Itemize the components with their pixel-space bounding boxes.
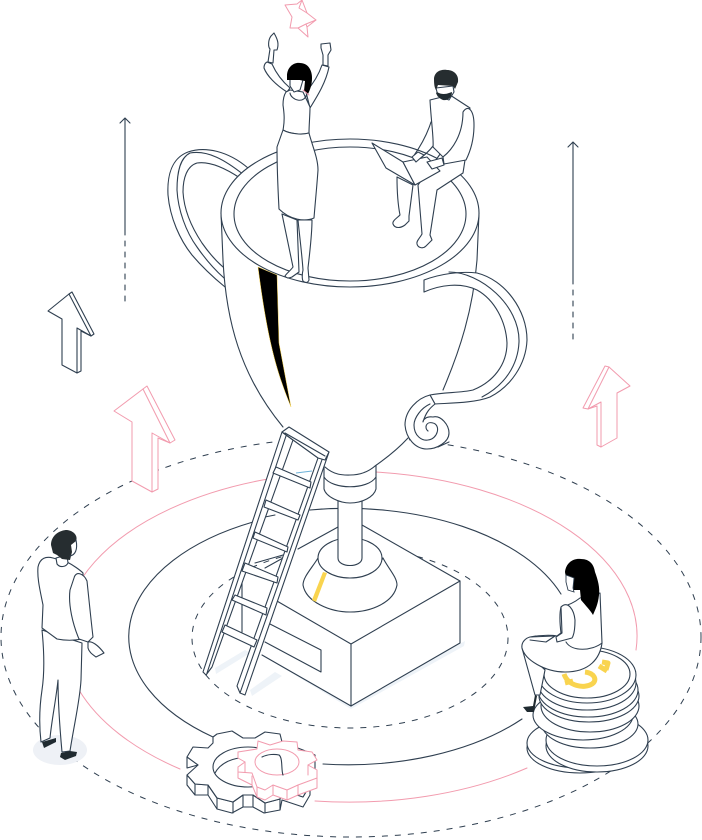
handle ribbon [424,272,527,404]
legs [282,214,299,278]
person: woman cheering on rim [264,33,331,282]
coin stack [527,647,648,773]
icon: gold dollar sign [564,662,608,686]
yellow highlight strip [312,572,327,602]
trophy base dome [303,538,397,612]
torso [430,95,470,157]
shadow [33,735,87,765]
arm [443,108,474,164]
plinth label plate [265,623,321,672]
trophy right handle with scroll [405,272,527,449]
dark gear [187,731,315,813]
right rail [237,452,329,695]
shoes [42,738,77,760]
gears [187,731,317,813]
arrow: pink 3d up left [114,386,175,492]
legs [40,630,82,752]
head and hair [290,78,303,92]
body [522,593,602,672]
body [38,557,83,640]
left rail [203,432,293,675]
arrow: pink 3d up right [583,366,630,447]
ring: pink [63,472,637,802]
back leg [393,177,413,228]
head [436,86,454,100]
trophy plinth [242,525,460,706]
trophy left handle [168,150,248,287]
top coin [538,647,636,703]
hair [565,559,599,615]
ring: dark solid [129,508,561,765]
trophy cup [221,213,479,475]
arm [70,574,93,642]
torso [283,90,310,134]
scroll spiral [405,395,449,449]
arrow: thin right [568,142,578,344]
collar [56,555,68,567]
rungs [222,467,311,647]
top bar [282,427,329,460]
pink gear hole [255,749,299,775]
lower leg and foot [522,648,545,695]
skirt [277,130,318,220]
icon: pink star [285,0,316,37]
trophy rim [221,139,479,287]
person: man with laptop on rim [372,70,474,248]
arm [556,605,575,642]
person: standing man [33,530,104,765]
arrow: dark 3d up [48,292,94,373]
trophy collar [324,465,376,503]
ring: inner dashed [192,548,508,728]
gear hole [213,747,283,787]
ladder [203,427,329,695]
hands [412,152,424,162]
black reflection [258,267,291,407]
person: woman sitting on coins [522,559,602,712]
laptop [372,143,415,185]
right hand [321,43,331,66]
ring: outer dashed [1,437,701,837]
left arm [264,62,290,92]
shadows under plinth and ladder [215,641,465,709]
pink gear [238,741,317,800]
right arm [306,65,329,108]
arrow: thin left [120,118,130,306]
face [566,575,574,592]
front leg [417,150,465,248]
hand [88,642,104,657]
hair [51,530,77,560]
trophy stem [338,500,362,566]
left hand [268,33,278,63]
